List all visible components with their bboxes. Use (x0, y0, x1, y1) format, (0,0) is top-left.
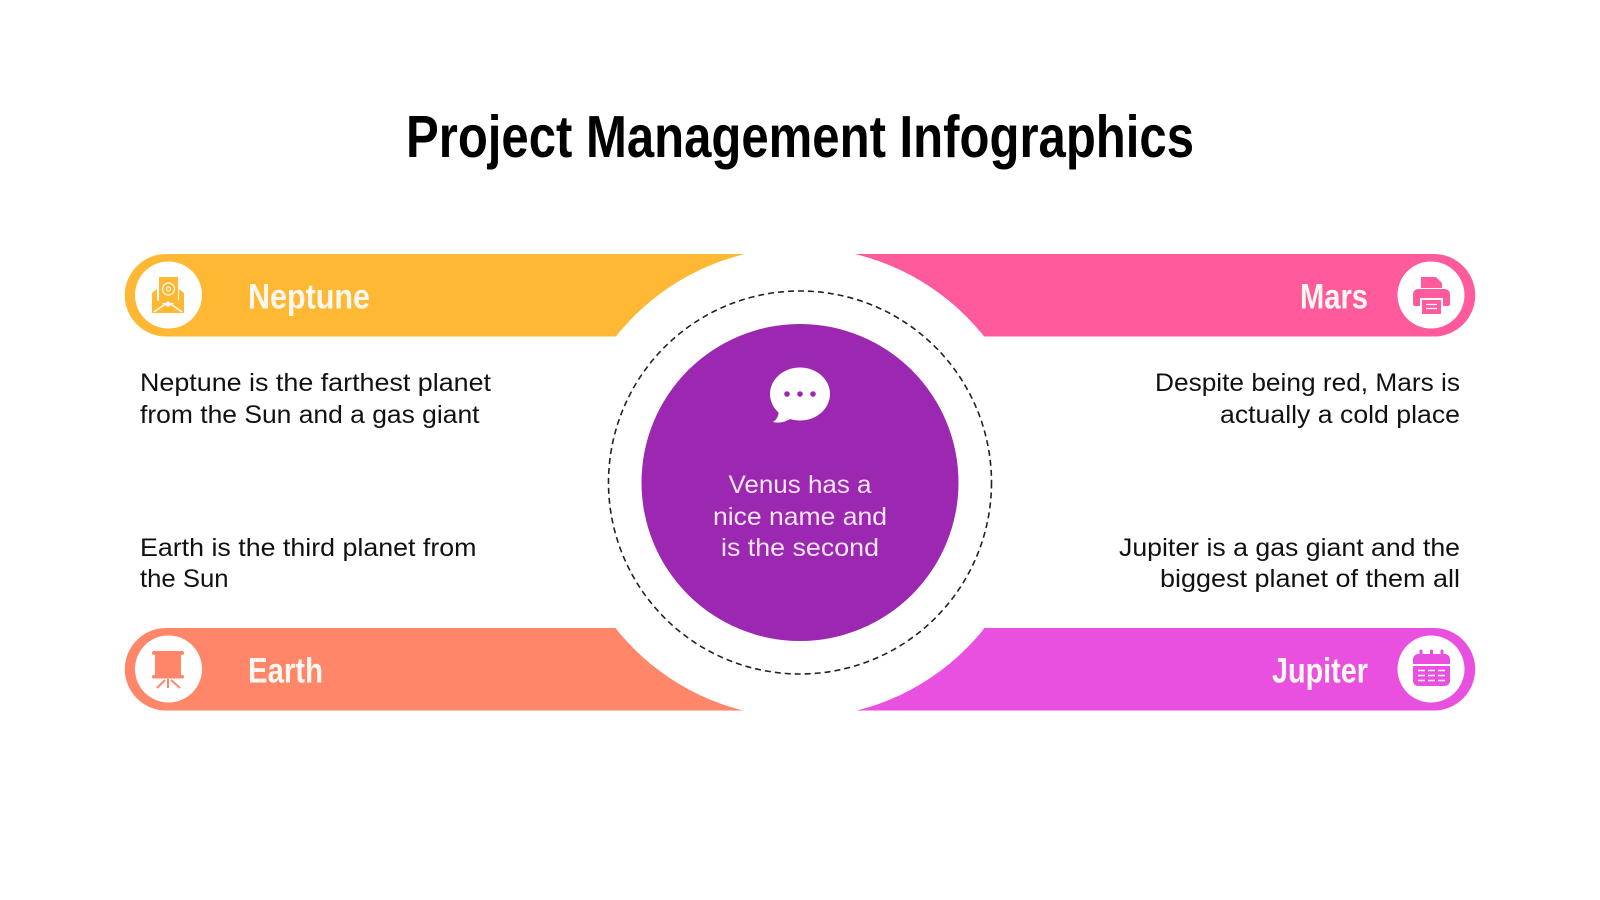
text: Neptune (140, 369, 491, 429)
center circle (642, 324, 958, 641)
text: Jupiter: biggest planet of them all (1160, 565, 1460, 593)
center text: is the second (721, 534, 879, 562)
icon: printer (1398, 262, 1464, 328)
text: Mars: Despite being red, Mars is (1155, 369, 1460, 397)
bar: Neptune (125, 254, 800, 336)
text: Earth (140, 534, 476, 593)
title: Project Management Infographics (406, 104, 1194, 170)
bar: Earth (125, 628, 800, 710)
label: Earth: Earth (248, 652, 323, 690)
text: Mars: actually a cold place (1220, 401, 1460, 429)
text: Jupiter: Jupiter is a gas giant and the (1119, 534, 1460, 562)
icon: envelope (135, 262, 202, 328)
dashed ring (608, 291, 992, 674)
icon: calendar (1398, 636, 1464, 702)
center text (713, 471, 887, 562)
white cut-out circle (565, 248, 1035, 718)
text: Jupiter (1119, 534, 1460, 593)
text: Earth: the Sun (140, 565, 228, 593)
center text: Venus has a (728, 471, 872, 499)
text: Earth: Earth is the third planet from (140, 534, 476, 562)
text: Mars (1155, 369, 1460, 429)
label: Neptune: Neptune (248, 278, 370, 316)
bar: Mars (800, 254, 1475, 336)
text: Neptune: Neptune is the farthest planet (140, 369, 491, 397)
icon: speech bubble (770, 368, 830, 423)
center text: nice name and (713, 503, 887, 531)
text: Neptune: from the Sun and a gas giant (140, 401, 480, 429)
label: Jupiter: Jupiter (1272, 652, 1368, 690)
icon: easel (135, 636, 202, 702)
bar: Jupiter (800, 628, 1475, 710)
label: Mars: Mars (1300, 278, 1368, 316)
